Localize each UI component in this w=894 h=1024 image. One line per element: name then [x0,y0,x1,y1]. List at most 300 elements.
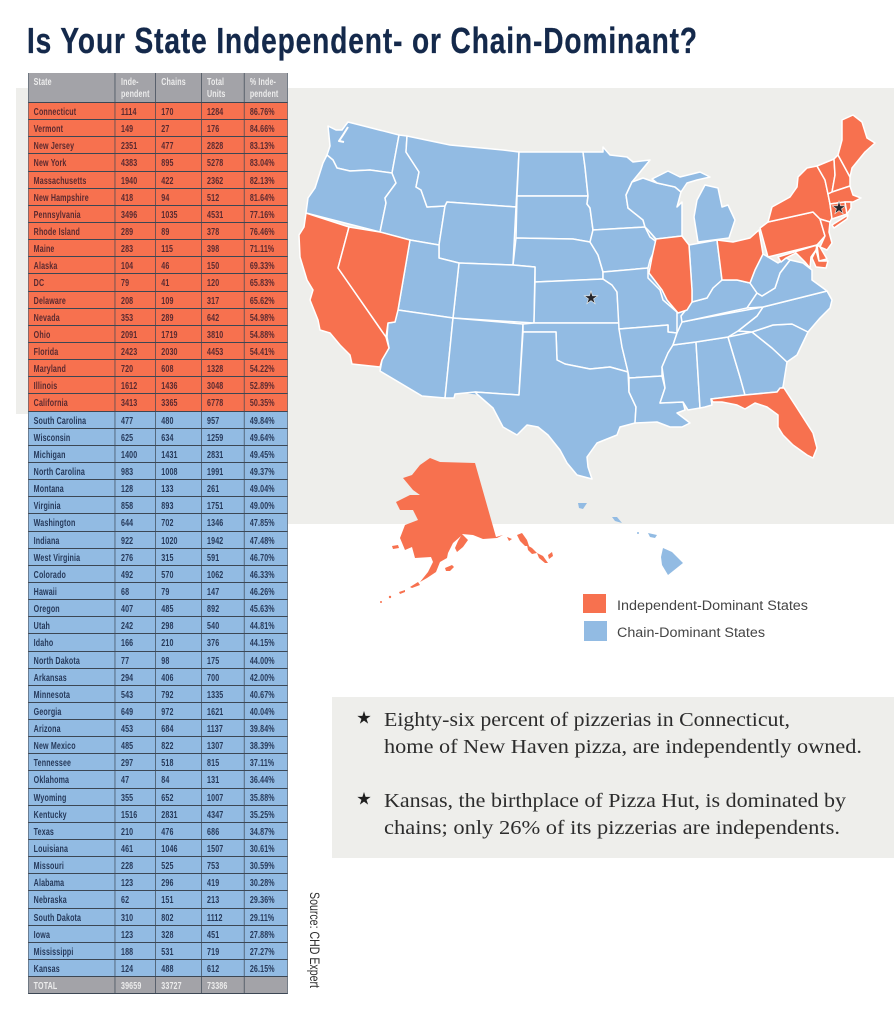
row: New Hampshire: New Hampshire [34,193,89,204]
row: Michigan: 1400 [121,450,137,461]
row: South Dakota: 29.11% [250,913,274,924]
row: New Jersey: 83.13% [250,141,275,152]
row: Oregon: 45.63% [250,604,275,615]
row: Massachusetts: 2362 [207,176,223,187]
row: Arkansas: 700 [207,673,219,684]
row: Florida: 54.41% [250,347,275,358]
row: Utah: 298 [161,621,174,632]
table header: % Inde- [250,77,276,88]
row: Missouri: 525 [161,861,174,872]
row: Wyoming [28,789,288,806]
row: Missouri: 753 [207,861,219,872]
table header: Units [207,89,225,100]
row: Virginia: 49.00% [250,501,275,512]
row: Georgia: 649 [121,707,133,718]
row: Vermont: Vermont [34,124,63,135]
row: Iowa: 451 [207,930,219,941]
state: Kentucky [681,280,757,322]
row: Vermont: 27 [161,124,169,135]
row: Texas [28,823,288,840]
row: DC: 65.83% [250,278,275,289]
row: Oklahoma: 36.44% [250,775,275,786]
state: Colorado [453,263,535,323]
row: South Dakota: South Dakota [34,913,81,924]
row: North Dakota: North Dakota [34,656,80,666]
row: Kansas: 124 [121,964,133,975]
row: Oregon: 892 [207,604,219,615]
state: South Carolina [752,324,808,362]
row: Kansas: Kansas [34,964,60,975]
row: Alabama: 419 [207,878,219,889]
row: North Dakota: 77 [121,656,129,666]
row: Nebraska: Nebraska [34,895,67,906]
state: New Hampshire [832,155,850,192]
row: Ohio [28,326,288,343]
row: Nevada: 289 [161,313,174,324]
row: South Carolina: 957 [207,416,219,427]
state: Pennsylvania [760,212,825,257]
row: Nebraska: 62 [121,895,129,906]
row: Connecticut: 1114 [121,107,137,118]
state: Rhode Island [845,202,851,214]
row: Texas: 210 [121,827,133,838]
row: Missouri [28,857,288,874]
row: New Mexico: 38.39% [250,741,275,752]
row: Montana: 261 [207,484,219,495]
row: Nevada: 353 [121,313,133,324]
state: Louisiana [629,376,690,427]
state: Mississippi [660,342,700,410]
row: Ohio: 2091 [121,330,137,341]
row: Wyoming: 652 [161,793,174,804]
row: Wisconsin [28,429,288,446]
row: New Mexico [28,737,288,754]
state: Utah [398,240,459,318]
row: Pennsylvania: 4531 [207,210,223,221]
row: New Mexico: New Mexico [34,741,76,752]
row: Utah: 44.81% [250,621,275,632]
row: Nevada: 642 [207,313,219,324]
row: Montana: 133 [161,484,174,495]
row: New York: 4383 [121,158,137,169]
row: North Dakota [28,652,288,669]
row: Wisconsin: 49.64% [250,433,275,444]
row: New Jersey: 2828 [207,141,223,152]
row: Illinois: 3048 [207,381,223,392]
row: New Jersey: 477 [161,141,174,152]
row: California: California [34,398,68,409]
state: Texas [475,332,636,479]
row: Alaska: 150 [207,261,219,272]
row: South Dakota: 1112 [207,913,223,924]
table header: State [34,77,52,88]
row: New Hampshire [28,189,288,206]
row: Maryland [28,360,288,377]
state: Montana [406,136,519,207]
row: Alabama: 123 [121,878,133,889]
state: Missouri [603,268,677,333]
row: Connecticut: 170 [161,107,174,118]
row: Tennessee: 37.11% [250,758,274,769]
row: Maryland: 608 [161,364,174,375]
row: Missouri: 228 [121,861,133,872]
state: Massachusetts [828,186,861,204]
row: Hawaii: 147 [207,587,219,598]
row: Kentucky: Kentucky [34,810,67,821]
row: Colorado: 46.33% [250,570,275,581]
row: Kansas: 612 [207,964,219,975]
callout text: Kansas: chains; only 26% of its pizzerias are independents. [384,817,840,839]
row: Arkansas: 406 [161,673,174,684]
row: DC: 41 [161,278,169,289]
row: Nebraska: 29.36% [250,895,275,906]
row: Indiana: 1942 [207,536,223,547]
row: South Carolina: 480 [161,416,174,427]
row: Tennessee: 297 [121,758,133,769]
callout panel [332,697,894,858]
row: Maine: Maine [34,244,55,255]
row: Delaware: Delaware [34,296,66,307]
row: Wyoming: Wyoming [34,793,66,804]
row: Virginia: 893 [161,501,174,512]
state: Florida [711,388,817,458]
row: Washington: Washington [34,518,75,529]
row: New York: New York [34,158,67,169]
row: Oregon [28,600,288,617]
star bullet 2 [357,792,371,805]
table header: Chains [161,77,186,88]
row: Virginia [28,497,288,514]
row: Florida: 2030 [161,347,178,358]
row: Mississippi: 719 [207,947,219,958]
row: Idaho: 44.15% [250,638,275,649]
row: Tennessee: Tennessee [34,758,71,769]
row: Vermont [28,120,288,137]
row: California: 3365 [161,398,178,409]
row: Arizona: 39.84% [250,724,275,735]
row: Arkansas: 294 [121,673,133,684]
row: New Mexico: 485 [121,741,133,752]
row: Maine: 398 [207,244,219,255]
row: Georgia [28,703,288,720]
state: Oregon [306,155,396,232]
row: South Carolina [28,412,288,429]
row: Iowa: 123 [121,930,133,941]
row: Minnesota [28,686,288,703]
row: Kentucky: 1516 [121,810,137,821]
row: Alaska: 104 [121,261,133,272]
row: Delaware: 317 [207,296,219,307]
data table: pizzerias by state [28,73,288,994]
row: Hawaii [28,583,288,600]
row: Florida: Florida [34,347,58,358]
row: Hawaii: 46.26% [250,587,275,598]
row: South Dakota: 802 [161,913,174,924]
legend [583,594,808,641]
row: Nebraska: 213 [207,895,219,906]
row: Arkansas: 42.00% [250,673,275,684]
row: Illinois: 52.89% [250,381,275,392]
row: Maine [28,240,288,257]
row: Louisiana: 30.61% [250,844,275,855]
callout text: Kansas [384,790,846,839]
row: Maryland: 54.22% [250,364,275,375]
state: Delaware [817,245,827,261]
row: Minnesota: 792 [161,690,174,701]
state: Vermont [817,159,835,194]
row: Michigan: 49.45% [250,450,275,461]
row: Washington: 644 [121,518,133,529]
row: Mississippi: 531 [161,947,174,958]
row: Wyoming: 35.88% [250,793,275,804]
row: Maryland: 1328 [207,364,223,375]
row: Wisconsin: 1259 [207,433,223,444]
state: New Mexico [445,318,523,398]
state: Wyoming [439,202,516,265]
row: Virginia: Virginia [34,501,61,512]
state: West Virginia [750,254,790,296]
row: Illinois: Illinois [34,381,57,392]
row: Washington [28,514,288,532]
state: North Carolina [738,291,832,332]
row: Alabama [28,874,288,891]
row: Iowa: 328 [161,930,174,941]
row: Illinois: 1436 [161,381,178,392]
star: Connecticut [832,201,846,214]
row: New Mexico: 1307 [207,741,223,752]
row: Wisconsin: 625 [121,433,133,444]
row: Minnesota: 40.67% [250,690,275,701]
row: Rhode Island: Rhode Island [34,227,80,238]
state: Maine [838,115,875,177]
state: Illinois [649,236,692,313]
state: Alabama [696,337,745,408]
row: Hawaii: 68 [121,587,129,598]
row: Louisiana [28,840,288,857]
row: Vermont: 149 [121,124,133,135]
row: Minnesota: Minnesota [34,690,70,701]
row: California: 50.35% [250,398,275,409]
row: South Dakota [28,909,288,926]
row: Idaho [28,634,288,652]
row: Louisiana: 461 [121,844,133,855]
row: Kentucky: 35.25% [250,810,275,821]
row: DC: DC [34,278,44,289]
row: Delaware: 109 [161,296,174,307]
row: Mississippi: Mississippi [34,947,74,958]
row: Colorado [28,566,288,583]
row: Oklahoma: 84 [161,775,169,786]
row: Arizona: 684 [161,724,174,735]
table header: pendent [250,89,278,100]
row: Massachusetts [28,172,288,189]
row: Indiana [28,532,288,549]
row: West Virginia: West Virginia [34,553,80,564]
row: Georgia: 972 [161,707,174,718]
row: Rhode Island: 89 [161,227,169,238]
row: New Hampshire: 418 [121,193,133,204]
row: Mississippi: 188 [121,947,133,958]
state: New York [768,166,832,222]
row: Tennessee [28,754,288,771]
row: Ohio: 3810 [207,330,223,341]
state: Minnesota [583,147,650,230]
row: Massachusetts: 1940 [121,176,137,187]
row: Texas: 686 [207,827,219,838]
row: Ohio: Ohio [34,330,50,341]
row: Georgia: Georgia [34,707,62,718]
row: Massachusetts: 82.13% [250,176,275,187]
callout text: Connecticut [384,709,862,758]
legend swatch: independent [583,594,606,613]
row: Maryland: 720 [121,364,133,375]
row: Alabama: Alabama [34,878,64,889]
state: Wisconsin [626,178,682,239]
row: Michigan: Michigan [34,450,66,461]
row: Utah: 242 [121,621,133,632]
row: Massachusetts: 422 [161,176,174,187]
row: Washington: 47.85% [250,518,275,529]
row: Washington: 1346 [207,518,223,529]
row: Oklahoma: 131 [207,775,219,786]
state: Tennessee [673,307,763,345]
row: Oregon: 407 [121,604,133,615]
row: Texas: Texas [34,827,54,838]
row: Colorado: Colorado [34,570,66,581]
row: Ohio: 1719 [161,330,178,341]
row: Alaska: Alaska [34,261,57,272]
row: Pennsylvania: 3496 [121,210,137,221]
state: Georgia [728,332,787,395]
row: Massachusetts: Massachusetts [34,176,86,187]
row: Louisiana: 1507 [207,844,223,855]
row: West Virginia: 315 [161,553,174,564]
row: Utah [28,617,288,634]
state: Arizona [380,310,453,398]
row: Rhode Island: 289 [121,227,133,238]
row: Alaska: 46 [161,261,169,272]
row: North Carolina: 983 [121,467,133,478]
row: total: 39659 [121,981,141,992]
row: Minnesota: 543 [121,690,133,701]
state: North Dakota [517,152,588,196]
row: Connecticut [28,103,288,120]
row: North Carolina [28,463,288,480]
row: Kansas [28,960,288,977]
row: Nebraska [28,891,288,909]
row: South Carolina: 49.84% [250,416,275,427]
row: Connecticut: 1284 [207,107,223,118]
table header: Inde- [121,77,139,88]
row: Oklahoma: Oklahoma [34,775,69,786]
row: Delaware [28,292,288,309]
row: North Carolina: North Carolina [34,467,85,478]
row: Idaho: 166 [121,638,133,649]
row: North Dakota: 44.00% [250,656,275,666]
row: Oregon: Oregon [34,604,60,615]
row: Michigan [28,446,288,463]
row: Alaska [28,257,288,274]
state: Indiana [689,240,722,302]
row: Arizona: 453 [121,724,133,735]
row: Arizona: Arizona [34,724,61,735]
row: Arizona: 1137 [207,724,223,735]
row: Indiana: 1020 [161,536,178,547]
row: South Carolina: South Carolina [34,416,86,427]
row: Indiana: 47.48% [250,536,275,547]
puget sound inlet [339,127,348,142]
row: West Virginia: 46.70% [250,553,275,564]
row: California: 6778 [207,398,223,409]
row: New Hampshire: 81.64% [250,193,275,204]
row: New York: 83.04% [250,158,275,169]
state: Michigan upper peninsula [652,171,710,192]
row: Kentucky: 4347 [207,810,223,821]
row: Alaska: 69.33% [250,261,275,272]
background panel: map area [16,88,894,524]
row: Pennsylvania: 77.16% [250,210,275,221]
row: Colorado: 570 [161,570,174,581]
row: Hawaii: Hawaii [34,587,57,598]
row: Delaware: 208 [121,296,133,307]
row: Connecticut: Connecticut [34,107,76,118]
row: Mississippi: 27.27% [250,947,275,958]
row: Indiana: Indiana [34,536,60,547]
row: West Virginia: 276 [121,553,133,564]
row: New Jersey: New Jersey [34,141,74,152]
star bullet 1 [357,711,371,724]
row: Colorado: 1062 [207,570,223,581]
row: West Virginia [28,549,288,566]
row: Missouri: 30.59% [250,861,275,872]
legend swatch: chain [584,621,607,641]
state: Virginia [747,260,827,308]
state: California [299,213,389,367]
row: Nevada [28,309,288,326]
state: Michigan lower peninsula [694,185,735,242]
map base fill [340,160,790,400]
row: Florida [28,343,288,360]
row: Kansas: 26.15% [250,964,275,975]
row: Montana: 128 [121,484,133,495]
row: Michigan: 2831 [207,450,223,461]
row: Delaware: 65.62% [250,296,275,307]
row: Tennessee: 815 [207,758,219,769]
row: Georgia: 40.04% [250,707,275,718]
row: Utah: 540 [207,621,219,632]
table header [28,73,288,103]
row: Mississippi [28,943,288,960]
row: Montana: Montana [34,484,64,495]
row: Arkansas: Arkansas [34,673,67,684]
row: Oregon: 485 [161,604,174,615]
table header: Total [207,77,224,88]
row: Montana [28,480,288,497]
table header: pendent [121,89,150,100]
row: Texas: 476 [161,827,174,838]
row: Idaho: 210 [161,638,174,649]
row: Montana: 49.04% [250,484,275,495]
state: Long Island [832,215,848,228]
row: Minnesota: 1335 [207,690,223,701]
row: Maine: 283 [121,244,133,255]
state: South Dakota [516,196,593,242]
row: Washington: 702 [161,518,174,529]
row: Indiana: 922 [121,536,133,547]
row: DC [28,274,288,292]
row: New York [28,154,288,172]
row: Nevada: Nevada [34,313,60,324]
